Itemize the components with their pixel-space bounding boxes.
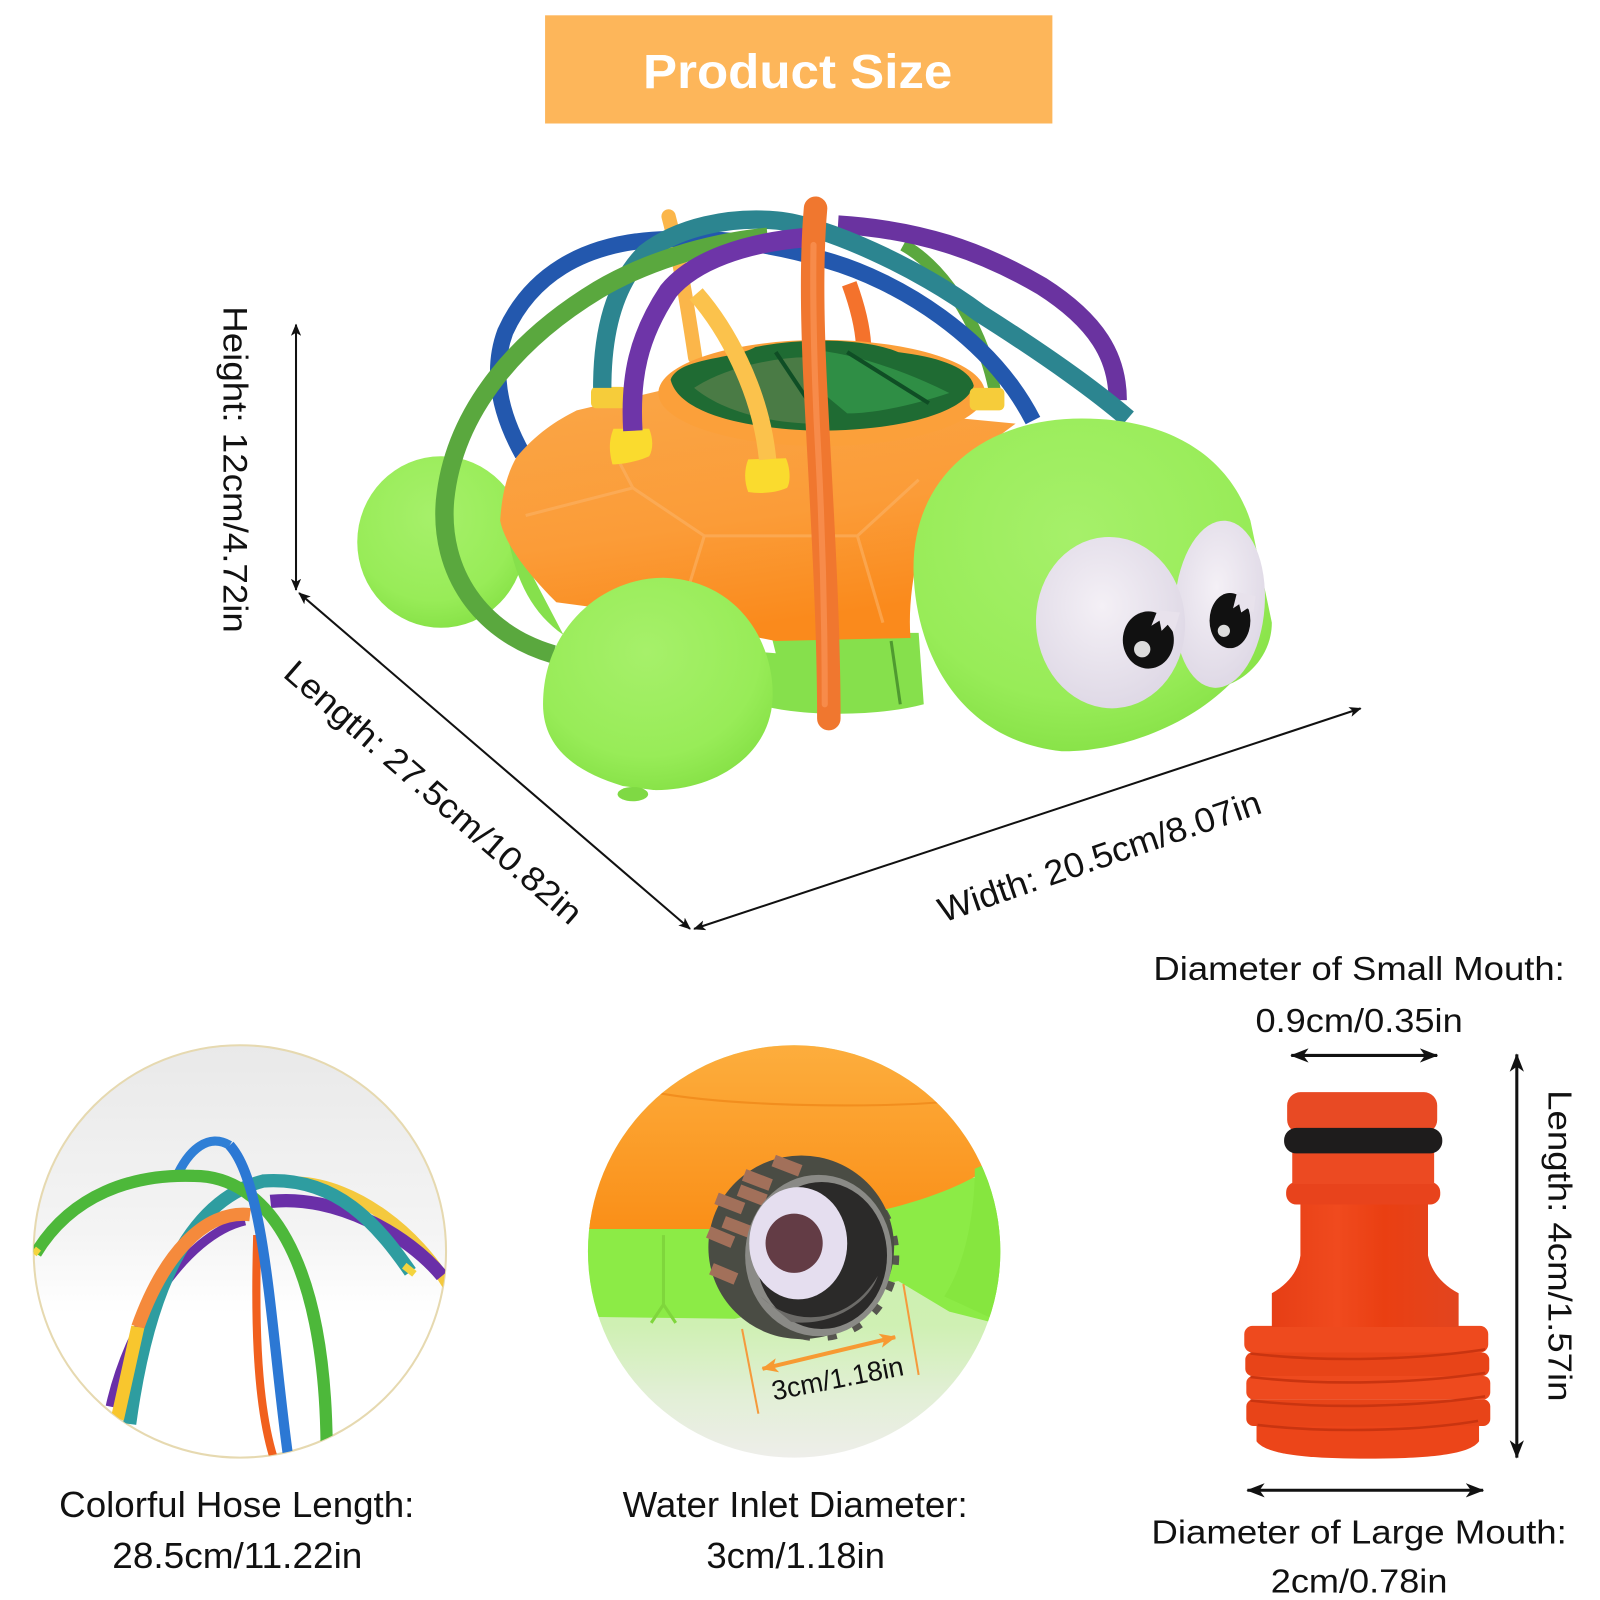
thread grooves (1250, 1349, 1485, 1430)
height dimension: Height: 12cm/4.72in (216, 306, 254, 633)
rubber ring (1284, 1128, 1442, 1153)
base (1257, 1419, 1479, 1459)
foot nub (618, 787, 648, 801)
socket rim (745, 1175, 892, 1336)
small mouth caption: Diameter of Small Mouth: (1153, 951, 1565, 988)
rear hoses (498, 216, 1033, 454)
purple right hose (838, 225, 1118, 400)
purple left hose (632, 238, 803, 431)
hose length caption (59, 1485, 414, 1576)
inlet size label: 3cm/1.18in (769, 1350, 906, 1406)
water hole (766, 1214, 823, 1273)
green base (582, 1174, 1011, 1327)
hose length circle (34, 1045, 447, 1458)
neck collar (1286, 1182, 1440, 1204)
large mouth caption: 2cm/0.78in (1271, 1563, 1447, 1600)
right eye (1169, 518, 1270, 691)
small mouth caption: 0.9cm/0.35in (1256, 1003, 1463, 1040)
large mouth caption: Diameter of Large Mouth: (1151, 1514, 1567, 1551)
red adapter fitting (1244, 1092, 1490, 1459)
spinner top (671, 341, 974, 431)
small mouth arrow (1291, 1054, 1437, 1057)
head (914, 419, 1272, 751)
shell (500, 390, 1016, 641)
water inlet caption: 3cm/1.18in (706, 1536, 885, 1576)
front leg (543, 578, 773, 790)
title banner: Product Size (643, 46, 952, 99)
green hose loop (444, 237, 768, 654)
hose length caption: Colorful Hose Length: (59, 1485, 414, 1525)
sprinkler collar (658, 340, 985, 446)
orange measure lines and arrow (742, 1284, 919, 1414)
caps (591, 387, 1004, 493)
water inlet caption (623, 1485, 968, 1576)
title banner (545, 15, 1052, 124)
water inlet caption: Water Inlet Diameter: (623, 1485, 968, 1525)
right pupil (1210, 592, 1256, 648)
length dimension (276, 593, 690, 932)
white seal (749, 1187, 847, 1299)
length dimension: Length: 27.5cm/10.82in (276, 654, 589, 932)
adapter length arrow (1515, 1054, 1518, 1458)
right leg (974, 1166, 1000, 1317)
body seam mark (651, 1235, 676, 1323)
width dimension: Width: 20.5cm/8.07in (933, 784, 1266, 930)
inner socket (756, 1182, 887, 1329)
large mouth caption (1151, 1514, 1567, 1600)
width dimension (694, 708, 1361, 930)
back leg (357, 456, 525, 628)
yellow main hose (696, 294, 768, 459)
adapter length label: Length: 4cm/1.57in (1540, 1090, 1577, 1401)
water inlet circle (582, 1031, 1011, 1458)
nozzle teeth (800, 1210, 900, 1341)
large mouth arrow (1247, 1489, 1483, 1492)
body underside (506, 526, 924, 714)
knurled blocks (708, 1161, 800, 1279)
orange shell (589, 1045, 984, 1229)
nozzle body (708, 1155, 894, 1339)
top cap (1287, 1092, 1437, 1133)
turtle sprinkler product (357, 208, 1272, 801)
small mouth caption (1153, 951, 1565, 1040)
teal hose (602, 220, 1128, 419)
flared body (1272, 1199, 1459, 1327)
hose length caption: 28.5cm/11.22in (112, 1536, 362, 1576)
shell plate lines (526, 449, 919, 623)
left pupil (1123, 610, 1180, 669)
orange hoop (813, 208, 829, 719)
thread rows (1244, 1326, 1490, 1426)
body slot (891, 641, 900, 704)
hoses (34, 1141, 447, 1458)
left eye (1030, 532, 1191, 713)
